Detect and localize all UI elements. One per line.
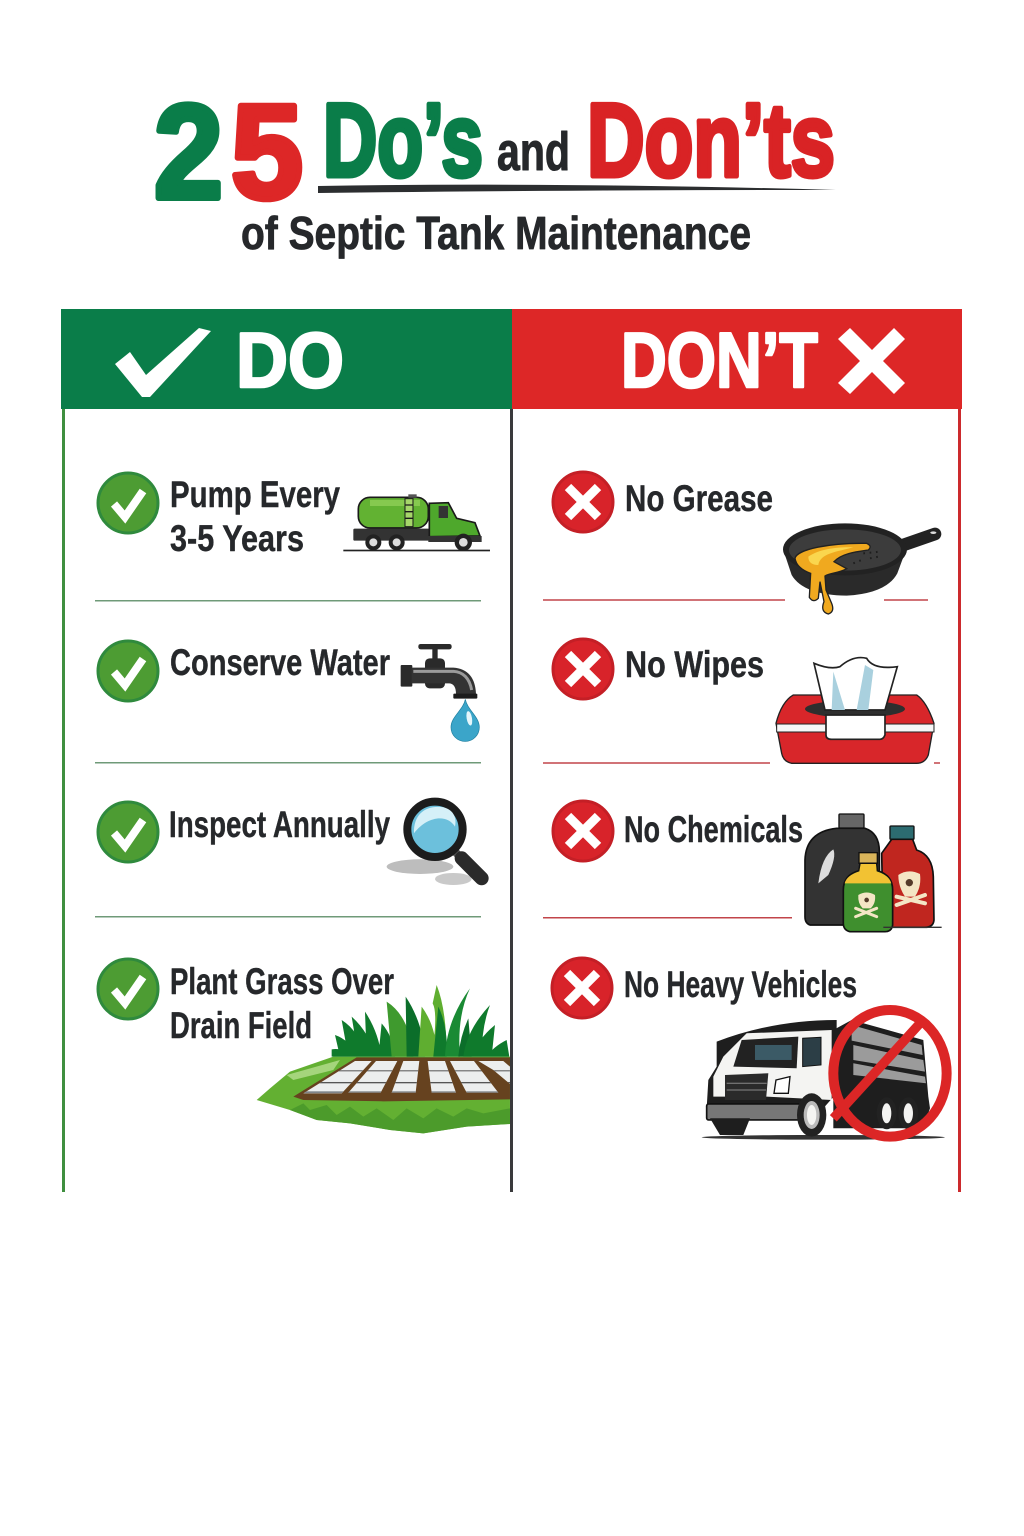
item: no grease: No Grease (625, 478, 773, 519)
item: no chemicals (553, 801, 942, 932)
panel: do column (61, 309, 513, 1192)
icon: wipes box (776, 658, 934, 763)
divider (543, 599, 928, 601)
title: 2 (154, 78, 223, 227)
title: Do’s (323, 83, 483, 199)
divider (543, 917, 792, 918)
item: no heavy vehicles: No Heavy Vehicles (624, 964, 857, 1005)
icon: septic pump truck (343, 494, 490, 551)
icon: grass over drain field (257, 985, 513, 1133)
do header (61, 309, 512, 409)
item: pump every 3-5 years: Pump Every (170, 474, 340, 515)
column divider (510, 409, 513, 1192)
title: Don’ts (587, 83, 835, 199)
item: plant grass over drain field: Plant Grass Over (170, 961, 394, 1002)
don't header: DON’T (621, 316, 818, 404)
item: no wipes (553, 639, 934, 763)
item: inspect annually: Inspect Annually (169, 804, 390, 845)
item: no grease (553, 472, 936, 614)
item: no chemicals: No Chemicals (624, 809, 803, 850)
item: pump every 3-5 years: 3-5 Years (170, 518, 304, 559)
divider (543, 762, 940, 764)
divider (95, 762, 481, 764)
do header: DO (236, 316, 344, 404)
divider (95, 916, 481, 918)
divider (95, 600, 481, 602)
item: plant grass over drain field: Drain Field (170, 1005, 312, 1046)
panel: don't column (512, 309, 962, 1192)
item: plant grass over drain field (98, 959, 513, 1133)
title: 5 (231, 78, 303, 227)
item: inspect annually (98, 802, 482, 885)
icon: prohibited heavy truck (702, 1010, 947, 1140)
item: conserve water: Conserve Water (170, 642, 390, 683)
icon: frying pan with grease (783, 523, 936, 614)
title: of Septic Tank Maintenance (241, 207, 751, 259)
icon: magnifying glass (387, 802, 482, 885)
item: no wipes: No Wipes (625, 644, 764, 685)
icon: chemical bottles (805, 814, 942, 932)
item: pump every 3-5 years (98, 473, 490, 559)
don't header (512, 309, 962, 409)
title: and (497, 122, 570, 182)
item: no heavy vehicles (552, 958, 947, 1140)
icon: faucet and drop (401, 644, 479, 741)
title (154, 78, 836, 259)
item: conserve water (98, 641, 479, 741)
